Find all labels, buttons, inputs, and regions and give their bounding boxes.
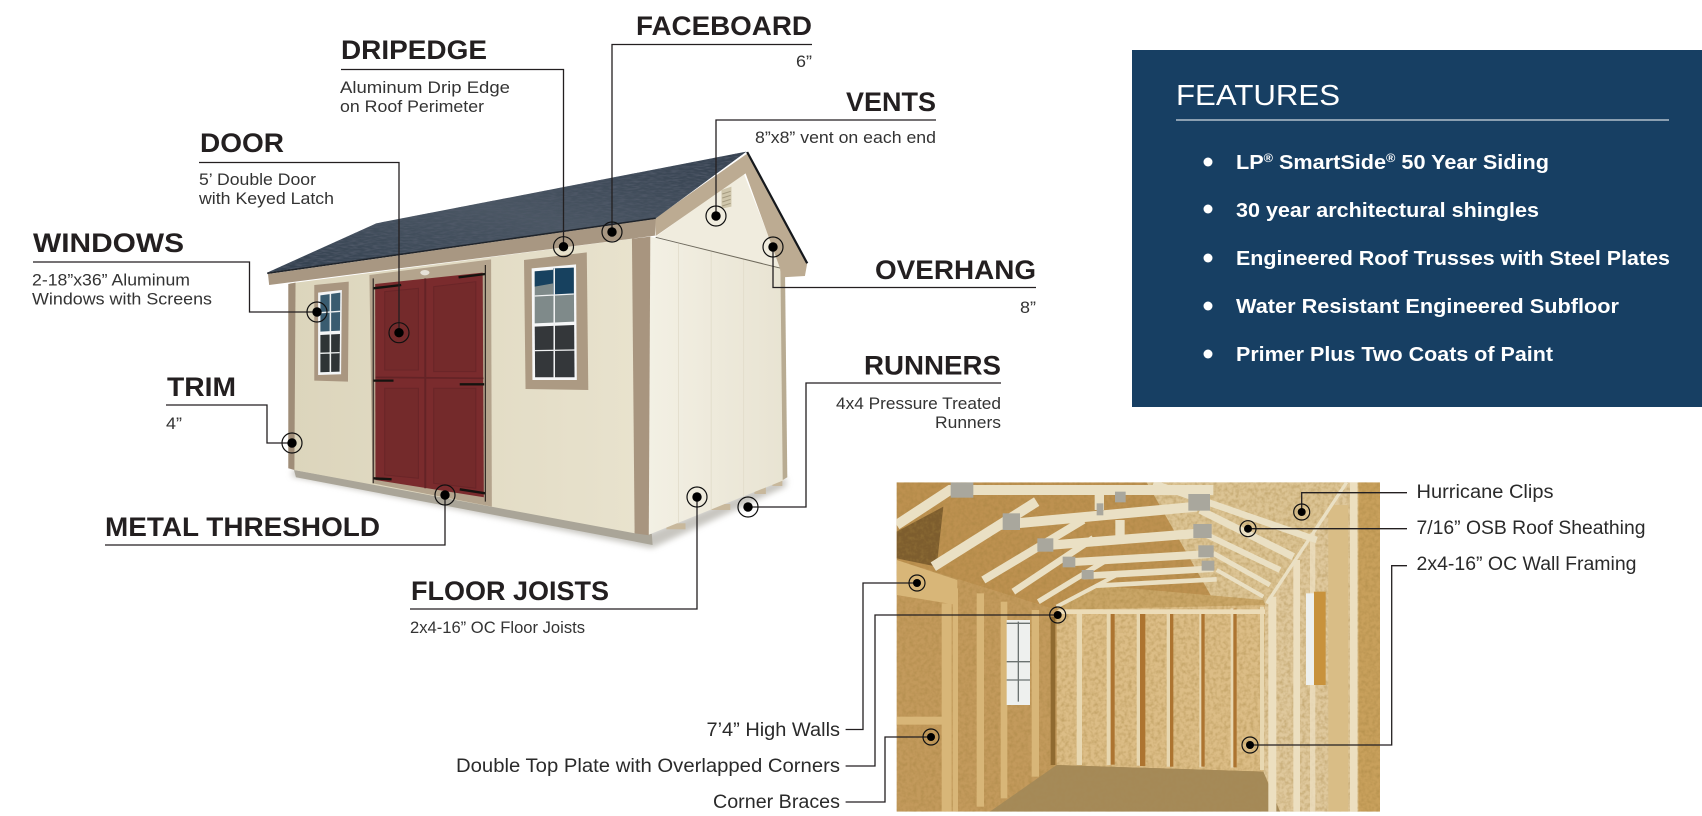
- callout: metal threshold: [105, 485, 455, 545]
- callout: runners: [738, 350, 1001, 517]
- callout: double top plate: Double Top Plate with Overlapped Corners: [456, 756, 840, 777]
- callout: windows: 2-18”x36” Aluminum: [32, 270, 190, 290]
- callout: corner braces: Corner Braces: [713, 792, 840, 813]
- callout: faceboard: 6”: [796, 52, 812, 71]
- feature list: Engineered Roof Trusses with Steel Plates: [1236, 247, 1670, 270]
- gable wall: [656, 173, 781, 268]
- callout: trim: 4”: [166, 414, 182, 433]
- floor tone: [1062, 765, 1280, 812]
- right wall: [1263, 482, 1358, 812]
- callout: vents: VENTS: [846, 87, 936, 117]
- roof edge: [747, 152, 807, 263]
- runners: [666, 479, 782, 529]
- callout: hurricane clips: Hurricane Clips: [1416, 482, 1554, 503]
- label sheet: [1306, 593, 1314, 685]
- callout: overhang: OVERHANG: [875, 255, 1036, 285]
- feature list: [1204, 151, 1670, 366]
- ceiling: [897, 482, 1347, 610]
- gable trim: [655, 153, 807, 277]
- roof: [267, 152, 746, 273]
- callout: wall framing: 2x4-16” OC Wall Framing: [1416, 554, 1636, 575]
- callout: hurricane clips: [1294, 482, 1554, 520]
- callout: floor joists: [410, 487, 707, 637]
- callout: vents: 8”x8” vent on each end: [755, 128, 936, 147]
- callout: trim: [166, 372, 302, 453]
- callout: door: [198, 128, 409, 343]
- trusses: [897, 482, 1347, 607]
- callout: faceboard: [602, 11, 812, 242]
- corner trim: [632, 237, 650, 535]
- back wall studs: [1077, 607, 1264, 770]
- interior window: [1007, 620, 1030, 705]
- callout: windows: Windows with Screens: [32, 290, 212, 308]
- callout: windows: WINDOWS: [33, 228, 184, 258]
- callout: dripedge: Aluminum Drip Edge: [340, 78, 510, 97]
- features heading: FEATURES: [1176, 80, 1340, 112]
- callout: runners: RUNNERS: [864, 350, 1001, 380]
- panel: interior photo: [897, 482, 1380, 812]
- panel: features: [1132, 50, 1702, 407]
- callout: osb roof sheathing: 7/16” OSB Roof Sheathing: [1416, 518, 1646, 539]
- osb texture: [897, 482, 1380, 812]
- callout: faceboard: FACEBOARD: [636, 11, 812, 41]
- door frame: [369, 259, 492, 507]
- feature list: SmartSide: [1273, 151, 1386, 174]
- callout: metal threshold: METAL THRESHOLD: [105, 512, 380, 542]
- right wall studs: [1268, 482, 1357, 812]
- callout: floor joists: FLOOR JOISTS: [411, 576, 609, 606]
- callout: dripedge: [340, 35, 574, 257]
- callout: dripedge: DRIPEDGE: [341, 35, 487, 65]
- callout: runners: Runners: [935, 413, 1001, 432]
- left corner trim: [288, 283, 296, 470]
- callout: dripedge: on Roof Perimeter: [340, 97, 484, 116]
- steel plates: [951, 482, 1214, 579]
- ground shadow: [292, 468, 786, 548]
- front wall: [290, 238, 635, 533]
- left wall studs: [897, 560, 1055, 812]
- callout: door: DOOR: [200, 128, 284, 158]
- roof shingle texture: [267, 152, 746, 273]
- emblem: [420, 270, 429, 275]
- callout: wall framing: [1242, 554, 1636, 753]
- callout: high walls: [706, 575, 925, 741]
- callout: corner braces: [713, 729, 939, 813]
- panel: house photo: [267, 152, 807, 548]
- side corner trim: [780, 268, 787, 480]
- callout: trim: TRIM: [167, 372, 236, 402]
- left wall: [897, 560, 1057, 812]
- callout: osb roof sheathing: [1240, 518, 1646, 539]
- feature list: Primer Plus Two Coats of Paint: [1236, 343, 1553, 366]
- callout: vents: [706, 87, 936, 226]
- feature list: ®: [1264, 151, 1273, 165]
- feature list: ®: [1386, 151, 1396, 165]
- side wall: [648, 237, 784, 535]
- left window: [314, 282, 349, 382]
- callout: floor joists: 2x4-16” OC Floor Joists: [410, 618, 585, 637]
- callout: overhang: [763, 237, 1036, 317]
- callout: high walls: 7’4” High Walls: [706, 720, 840, 741]
- feature list: LP: [1236, 151, 1262, 174]
- interior base: [897, 482, 1380, 812]
- features background: [1132, 50, 1702, 407]
- callout: door: with Keyed Latch: [198, 189, 334, 208]
- right window: [524, 252, 588, 390]
- gable seam: [656, 237, 781, 268]
- gable vent: [721, 187, 731, 209]
- back wall: [1057, 605, 1265, 772]
- floor: [990, 765, 1280, 812]
- callout: windows: [32, 228, 327, 322]
- callout: overhang: 8”: [1020, 298, 1036, 317]
- feature list: 50 Year Siding: [1395, 151, 1549, 174]
- door: [373, 265, 485, 502]
- feature list: Water Resistant Engineered Subfloor: [1236, 295, 1619, 318]
- fascia: [268, 219, 656, 285]
- callout: door: 5’ Double Door: [199, 170, 316, 189]
- callout: double top plate: [456, 607, 1066, 777]
- callout: runners: 4x4 Pressure Treated: [836, 394, 1001, 413]
- foundation: [294, 470, 653, 545]
- feature list: 30 year architectural shingles: [1236, 199, 1539, 222]
